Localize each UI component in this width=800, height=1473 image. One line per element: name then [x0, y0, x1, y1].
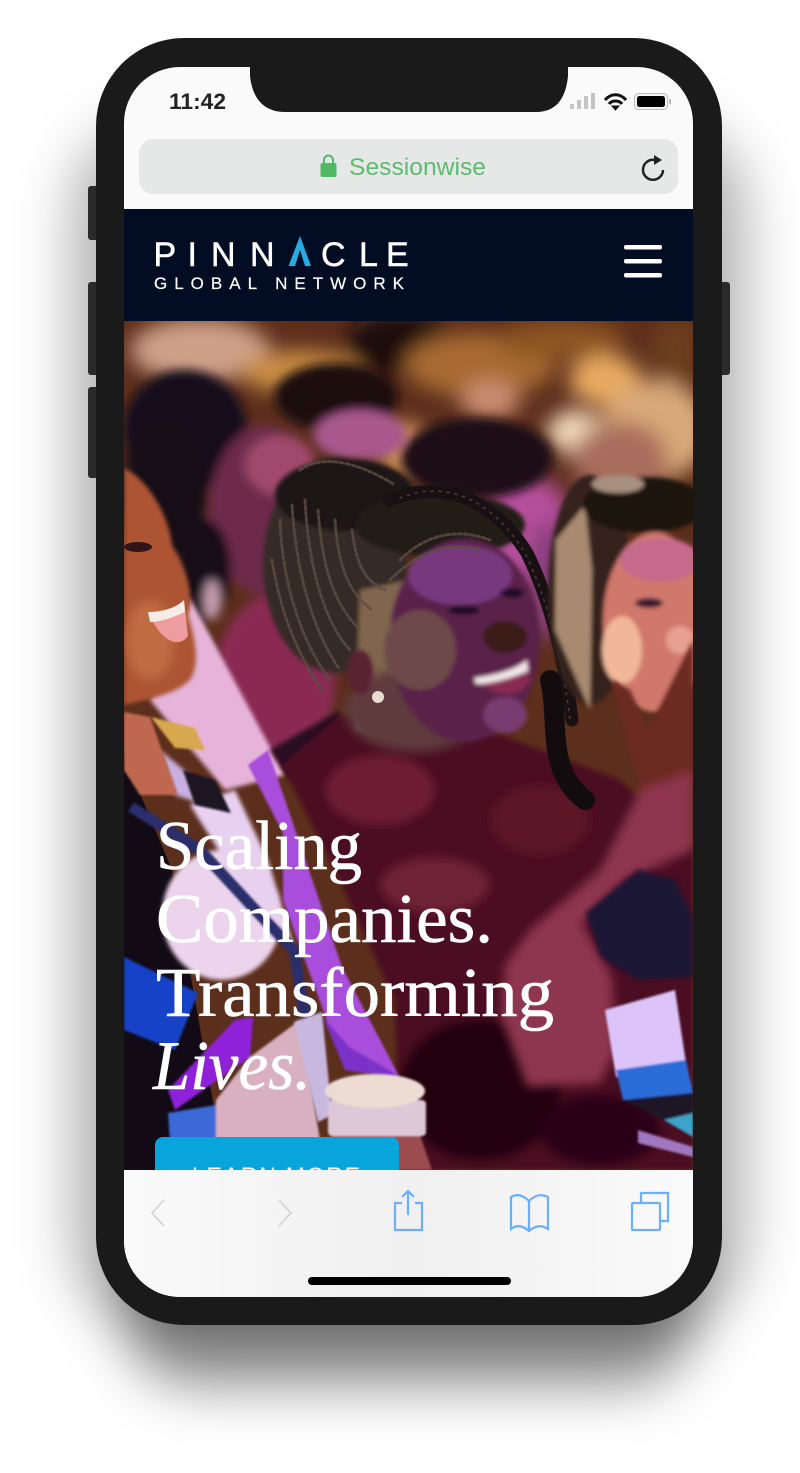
icon: forward chevron	[279, 1200, 291, 1226]
home indicator	[308, 1277, 511, 1285]
logo wordmark: CLE	[321, 236, 409, 274]
main woman	[263, 457, 585, 800]
coffee cup	[325, 1074, 432, 1170]
logo peak	[288, 236, 311, 266]
headline	[152, 808, 554, 1105]
dress	[282, 715, 693, 1170]
hair	[263, 457, 525, 745]
lanyard	[131, 717, 332, 1122]
logo wordmark: PINN	[154, 236, 275, 274]
left woman	[124, 468, 196, 795]
headline: Scaling	[156, 808, 362, 885]
headline: Transforming	[156, 955, 554, 1032]
screen background	[124, 67, 693, 1297]
wristband	[586, 870, 693, 980]
hero photo	[123, 313, 710, 1197]
notch	[250, 60, 568, 112]
phone side buttons	[88, 186, 730, 478]
icon: lock	[320, 156, 336, 177]
neck and chin	[345, 668, 485, 752]
icon: cellular signal	[570, 93, 595, 109]
logo	[154, 236, 411, 293]
status bar	[169, 89, 671, 114]
icon: battery	[634, 94, 671, 110]
scarf	[124, 750, 401, 1170]
white blouse	[160, 750, 295, 980]
learn more button: LEARN MORE	[192, 1162, 360, 1188]
site header	[124, 209, 693, 321]
site name: Sessionwise	[349, 154, 486, 181]
clock: 11:42	[169, 89, 226, 114]
arm	[501, 770, 693, 1087]
badge on right	[605, 990, 693, 1157]
phone body	[96, 38, 722, 1325]
icon: tabs	[632, 1193, 668, 1230]
right woman	[548, 475, 707, 712]
blurred crowd	[130, 313, 710, 640]
phone drop shadow	[72, 120, 746, 1385]
headline: Lives.	[152, 1028, 311, 1105]
white shirt, left	[150, 598, 285, 790]
learn more button	[155, 1137, 399, 1170]
icon: share	[395, 1191, 422, 1230]
safari toolbar	[124, 1170, 693, 1297]
icon: wifi	[605, 95, 626, 110]
ear and earring	[347, 650, 384, 703]
left woman jacket	[124, 756, 214, 1170]
icon: menu	[624, 245, 662, 278]
address bar	[139, 139, 678, 194]
dark gap under main woman	[270, 710, 340, 780]
headline: Companies.	[156, 881, 493, 958]
hand	[612, 640, 693, 800]
logo wordmark	[154, 236, 411, 293]
icon: reload	[643, 155, 663, 180]
icon: back chevron	[152, 1200, 164, 1226]
icon: bookmarks	[511, 1195, 548, 1231]
face	[384, 538, 540, 742]
braids and hair strands	[272, 462, 585, 800]
logo wordmark: GLOBAL NETWORK	[154, 274, 411, 293]
